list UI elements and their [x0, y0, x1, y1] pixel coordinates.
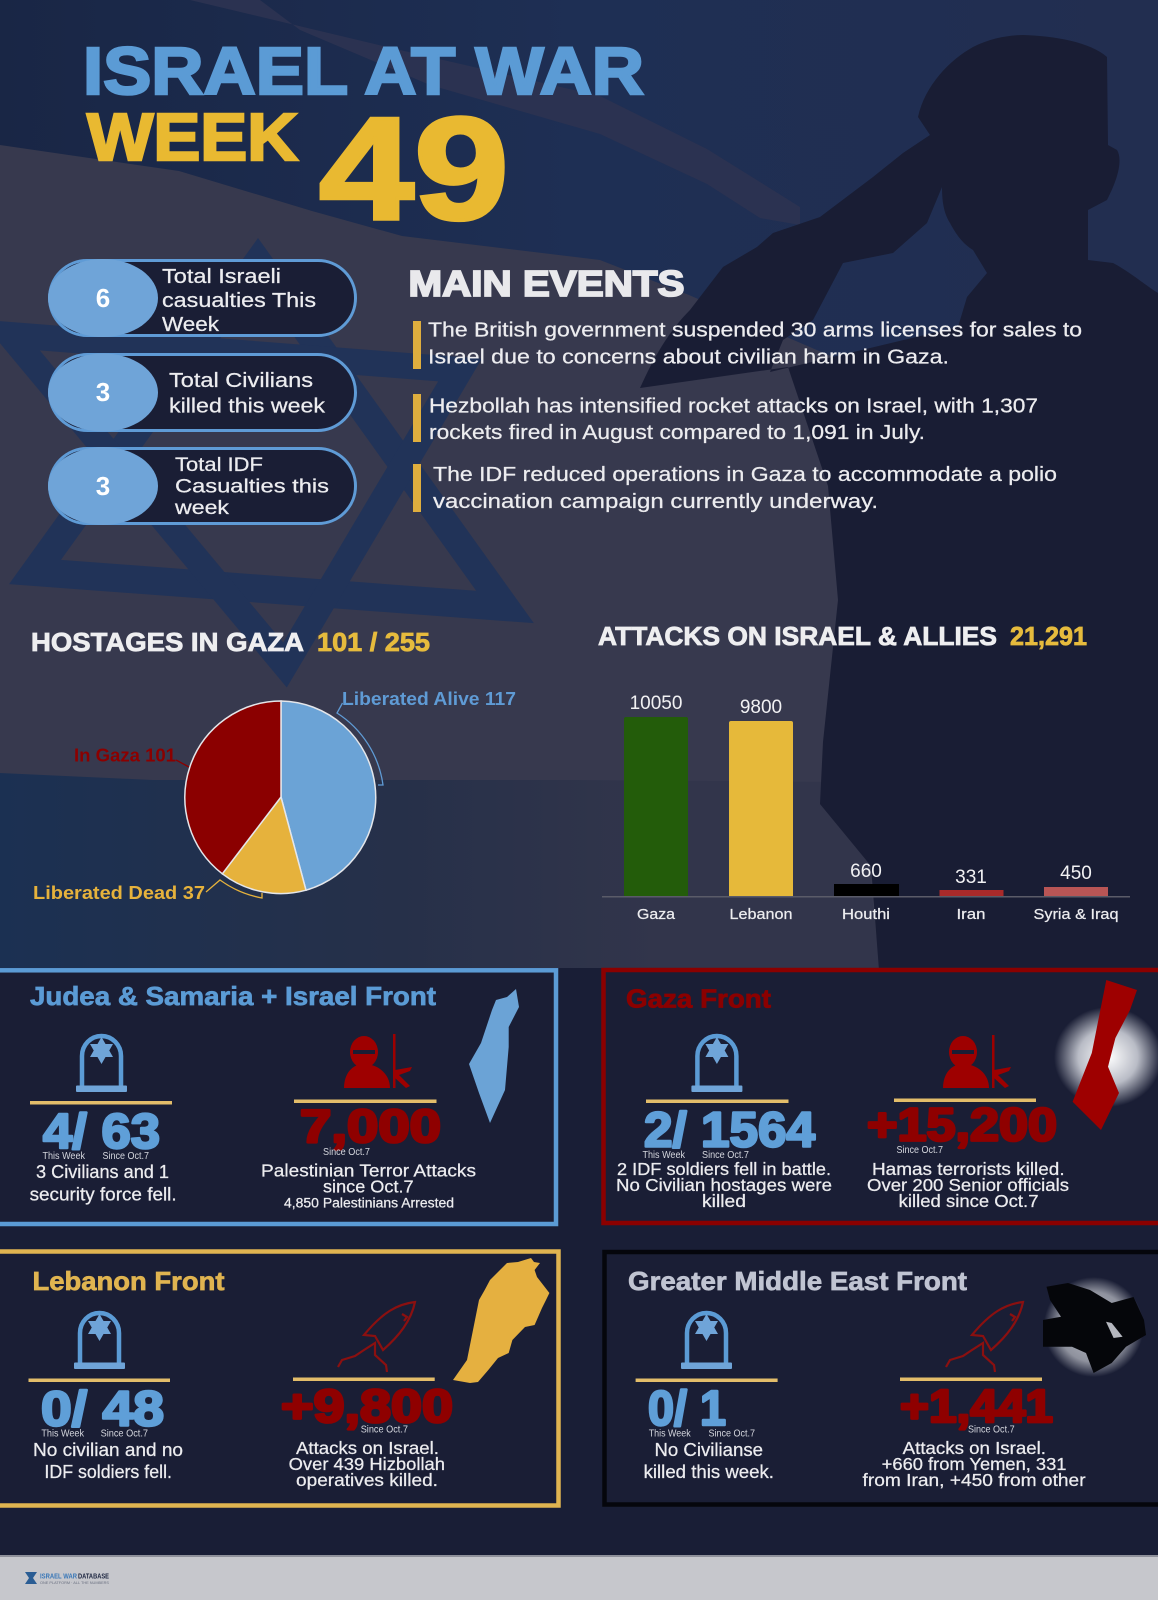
stat pill: total IDF casualties: Total IDF	[175, 454, 263, 476]
panel: Gaza front: This Week	[642, 1150, 686, 1161]
heading: Greater Middle East Front	[628, 1266, 967, 1296]
stat: fallen: 2/ 1564	[644, 1104, 815, 1158]
panel: Gaza front: killed	[702, 1191, 746, 1211]
panel: Judea & Samaria + Israel front: Since Oct.7	[102, 1151, 149, 1162]
label: liberated dead	[33, 880, 262, 903]
bar chart: attacks: Gaza	[637, 906, 676, 923]
heading: Gaza Front	[626, 984, 771, 1014]
stat: fallen: 0/ 1	[648, 1382, 726, 1436]
event: Hezbollah rockets: Hezbollah has intensified rocket attacks on Israel, with 1,307	[429, 394, 1038, 418]
stat pill: total civilians killed: killed this week	[169, 396, 326, 418]
icon: terrorist	[344, 1034, 412, 1088]
bar chart: attacks: Iran	[956, 906, 986, 923]
event: polio vaccination: The IDF reduced operations in Gaza to accommodate a polio	[433, 463, 1057, 486]
label: liberated alive: Liberated Alive 117	[342, 689, 516, 709]
panel: Greater Middle East front: killed this week.	[644, 1462, 774, 1482]
stat pill: total civilians killed: Total Civilians	[169, 370, 313, 392]
bar chart: attacks: 9800	[740, 697, 782, 718]
icon: Israel map	[469, 989, 519, 1123]
bar chart: attacks	[602, 693, 1130, 923]
bar chart: attacks: Lebanon	[730, 906, 792, 923]
title: ISRAEL AT WAR	[83, 34, 644, 109]
panel: Greater Middle East front: No Civilianse	[654, 1440, 763, 1460]
footer logo	[25, 1572, 109, 1585]
hostages heading	[31, 627, 430, 657]
pie chart: hostages	[33, 689, 516, 903]
icon: tombstone	[76, 1036, 127, 1092]
stat pill: total IDF casualties: Casualties this	[175, 476, 329, 498]
panel: Lebanon front: Since Oct.7	[101, 1429, 148, 1440]
soldier silhouette	[640, 35, 1158, 970]
heading: Lebanon Front	[32, 1266, 225, 1296]
label: in Gaza: In Gaza 101	[74, 746, 176, 766]
heading: Judea & Samaria + Israel Front	[30, 981, 436, 1011]
dark lower background	[0, 968, 1158, 1556]
stat pill: total IDF casualties: 3	[96, 471, 110, 501]
panel: Greater Middle East front	[604, 1252, 1158, 1504]
stat pill: total Israeli casualties: Week	[162, 314, 220, 336]
panel: Gaza front: Since Oct.7	[702, 1150, 749, 1161]
event: polio vaccination: vaccination campaign currently underway.	[433, 490, 878, 513]
stat: attacks: +1,441	[900, 1380, 1053, 1432]
panel: Greater Middle East front: Attacks on Israel.	[903, 1438, 1046, 1458]
panel: Judea & Samaria + Israel front: This Week	[42, 1151, 86, 1162]
panel: Lebanon front: Attacks on Israel.	[296, 1438, 439, 1458]
stat: attacks: 7,000	[300, 1100, 441, 1152]
panel: Judea & Samaria + Israel front: 3 Civilians and 1	[36, 1162, 169, 1182]
panel: Lebanon front: operatives killed.	[296, 1470, 438, 1490]
stat pill: total Israeli casualties: 6	[96, 283, 110, 313]
stat pill: total IDF casualties: week	[174, 497, 229, 519]
attacks heading: 21,291	[1010, 621, 1087, 651]
icon: Lebanon map	[453, 1258, 549, 1383]
stat: fallen: 4/ 63	[43, 1105, 160, 1159]
panel: Gaza front: No Civilian hostages were	[616, 1175, 832, 1195]
panel: Judea & Samaria + Israel front: Palestinian Terror Attacks	[261, 1161, 476, 1181]
bar chart: attacks: 331	[955, 867, 987, 888]
stat pill: total Israeli casualties: Total Israeli	[162, 266, 281, 288]
icon: terrorist	[943, 1035, 1011, 1088]
panel: Gaza front: killed since Oct.7	[899, 1191, 1038, 1211]
panel: Greater Middle East front: Since Oct.7	[968, 1425, 1015, 1436]
stat: attacks: +9,800	[281, 1380, 453, 1432]
icon: tombstone	[691, 1036, 742, 1092]
title: 49	[319, 87, 509, 250]
panel: Judea & Samaria + Israel front: security force fell.	[30, 1185, 177, 1205]
panel: Lebanon front	[0, 1252, 558, 1506]
stat: fallen: 0/ 48	[41, 1382, 164, 1436]
panel: Gaza front	[604, 970, 1158, 1223]
panel: Judea & Samaria + Israel front: Since Oct.7	[323, 1147, 370, 1158]
panel: Lebanon front: Over 439 Hizbollah	[289, 1454, 445, 1474]
event: Hezbollah rockets: rockets fired in August compared to 1,091 in July.	[429, 421, 925, 444]
panel: Lebanon front: No civilian and no	[33, 1440, 183, 1460]
footer logo: ONE PLATFORM · ALL THE NUMBERS	[40, 1580, 109, 1585]
event: polio vaccination	[413, 463, 1057, 513]
panel: Gaza front: Over 200 Senior officials	[867, 1175, 1069, 1195]
event: Hezbollah rockets	[413, 394, 1038, 444]
title: WEEK	[87, 100, 298, 175]
panel: Gaza front: Since Oct.7	[896, 1145, 943, 1156]
panel: Greater Middle East front: from Iran, +450 from other	[862, 1470, 1086, 1490]
panel: Greater Middle East front: This Week	[649, 1429, 692, 1440]
panel: Lebanon front: This Week	[41, 1429, 85, 1440]
stat pill: total IDF casualties	[48, 447, 356, 525]
panel: Lebanon front: IDF soldiers fell.	[44, 1462, 172, 1482]
panel: Judea & Samaria + Israel front	[0, 970, 556, 1224]
title	[83, 34, 644, 250]
icon: Gaza map with glow	[1054, 980, 1158, 1130]
hostages heading: HOSTAGES IN GAZA	[31, 627, 304, 657]
panel: Judea & Samaria + Israel front: since Oct.7	[323, 1177, 414, 1197]
footer logo: DATABASE	[78, 1574, 109, 1580]
footer bar	[0, 1555, 1158, 1600]
icon: Middle East map with glow	[1043, 1277, 1146, 1377]
attacks heading: ATTACKS ON ISRAEL & ALLIES	[598, 621, 997, 651]
stat pill: total Israeli casualties: casualties This	[162, 290, 316, 312]
panel: Judea & Samaria + Israel front: 4,850 Palestinians Arrested	[284, 1196, 454, 1211]
icon: tombstone	[681, 1313, 732, 1369]
stat pill: total civilians killed	[48, 354, 356, 432]
footer logo: ISRAEL WAR	[40, 1574, 77, 1580]
bar chart: attacks: 660	[850, 861, 882, 882]
label: liberated alive	[337, 689, 516, 785]
icon: rocket	[338, 1302, 415, 1372]
stat: Hamas terrorists killed: +15,200	[867, 1098, 1057, 1150]
stat pill: total civilians killed: 3	[96, 377, 110, 407]
bar chart: attacks: Syria & Iraq	[1034, 906, 1118, 923]
label: liberated dead: Liberated Dead 37	[33, 883, 205, 903]
panel: Lebanon front: Since Oct.7	[361, 1425, 408, 1436]
panel: Gaza front: Hamas terrorists killed.	[872, 1159, 1065, 1179]
panel: Greater Middle East front: Since Oct.7	[708, 1429, 755, 1440]
main events heading: MAIN EVENTS	[408, 263, 684, 304]
panel: Gaza front: 2 IDF soldiers fell in battle.	[617, 1159, 831, 1179]
event: British arms licenses: The British government suspended 30 arms licenses for sales to	[428, 318, 1082, 342]
icon: rocket	[946, 1302, 1023, 1372]
hostages heading: 101 / 255	[317, 627, 430, 657]
background: waving flag	[0, 0, 1158, 970]
stat pill: total Israeli casualties	[48, 259, 356, 337]
panel: Greater Middle East front: +660 from Yemen, 331	[882, 1454, 1066, 1474]
bar chart: attacks: 10050	[630, 693, 682, 714]
event: British arms licenses	[413, 318, 1082, 369]
icon: tombstone	[74, 1313, 125, 1369]
bar chart: attacks: 450	[1060, 863, 1092, 884]
event: British arms licenses: Israel due to concerns about civilian harm in Gaza.	[428, 346, 949, 368]
bar chart: attacks: Houthi	[842, 906, 890, 923]
